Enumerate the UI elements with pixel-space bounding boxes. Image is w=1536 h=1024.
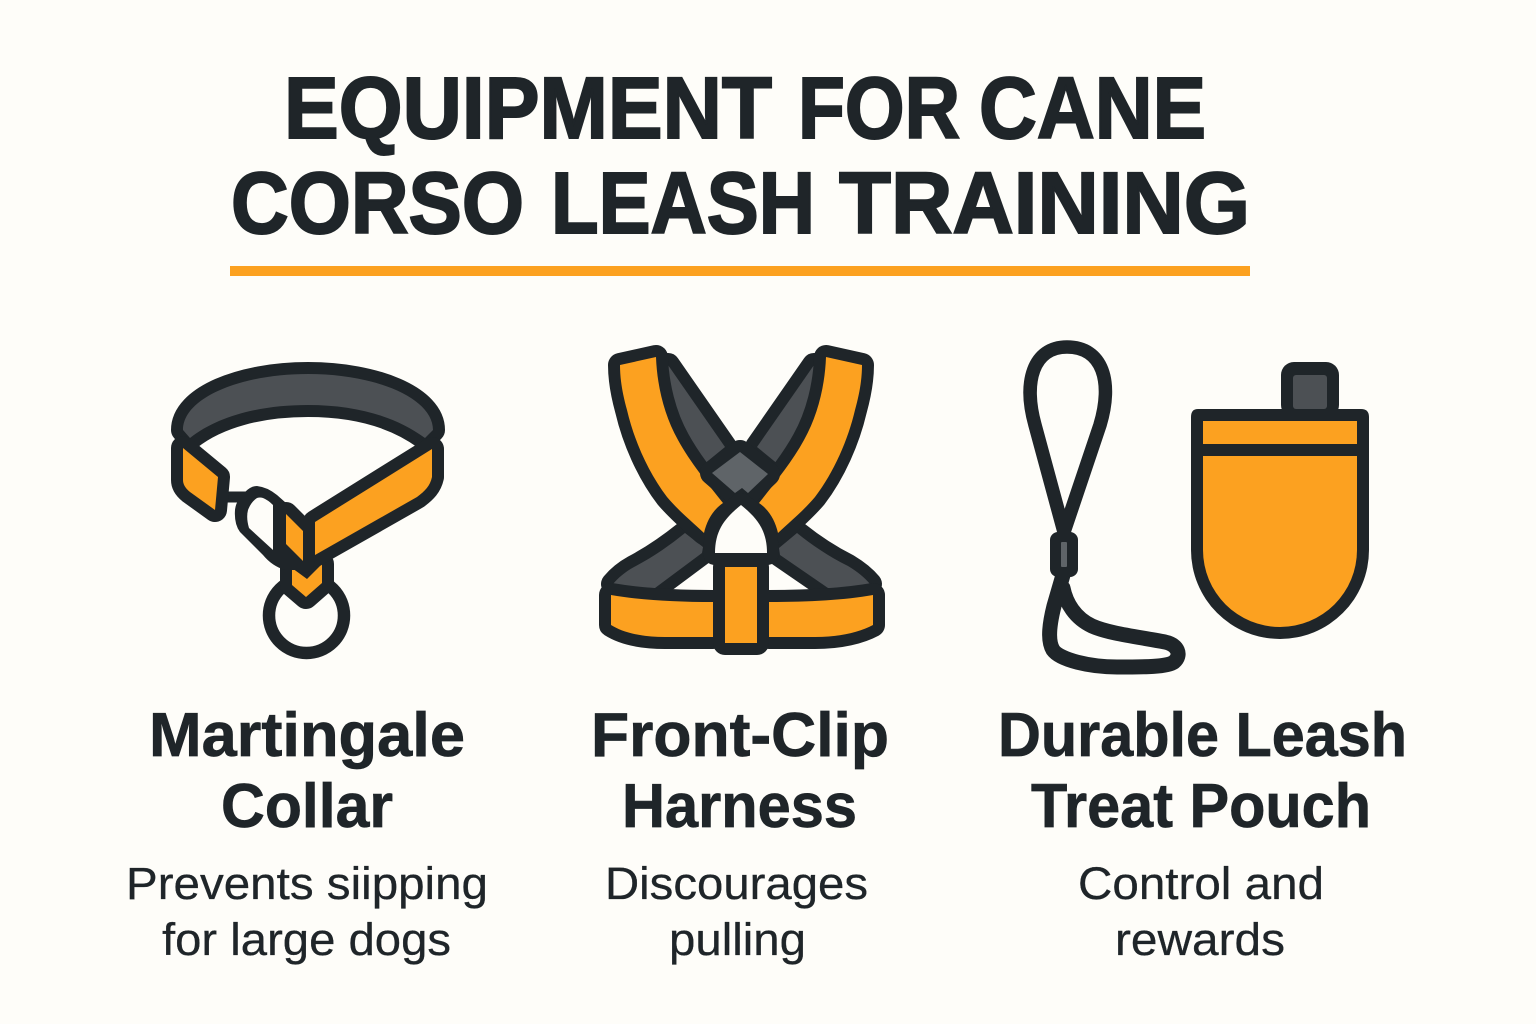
harness chest band right [769, 595, 873, 637]
icon: front-clip harness [611, 357, 873, 643]
title: EQUIPMENT [284, 60, 772, 157]
harness centre strap [725, 567, 757, 643]
harness neck opening [715, 505, 767, 553]
label: durable leash and treat pouch: Treat Pouch [1031, 772, 1371, 841]
harness right inner webbing [757, 365, 814, 465]
harness left shoulder strap [620, 357, 723, 533]
description: durable leash and treat pouch [1078, 858, 1324, 965]
icon: treat pouch [1191, 362, 1369, 639]
description: front-clip harness [605, 858, 868, 965]
harness lower left strap [613, 533, 703, 588]
label: front-clip harness: Harness [622, 772, 857, 841]
description: martingale collar: for large dogs [162, 914, 451, 965]
description: front-clip harness: pulling [669, 914, 806, 965]
title: TRAINING [839, 155, 1250, 252]
leash lower strand [1050, 575, 1178, 667]
leash handle loop [1030, 347, 1105, 532]
description: durable leash and treat pouch: rewards [1115, 914, 1285, 965]
title underline [230, 266, 1250, 276]
collar centre strap [286, 514, 303, 561]
title [231, 60, 1250, 252]
description: front-clip harness: Discourages [605, 858, 868, 909]
title: FOR [798, 60, 960, 157]
collar sliding loop [226, 486, 303, 570]
pouch outline [1191, 409, 1369, 639]
description: durable leash and treat pouch: Control and [1078, 858, 1324, 909]
leash clasp highlight [1061, 542, 1067, 567]
label: front-clip harness [591, 701, 889, 841]
pouch tab insert [1293, 375, 1327, 409]
collar left strap [183, 448, 218, 510]
leash clasp [1050, 532, 1078, 577]
collar ring [269, 578, 344, 653]
collar back band [183, 374, 433, 438]
label: martingale collar: Martingale [149, 701, 465, 770]
harness chest band left [611, 595, 713, 637]
collar lower tab [292, 564, 322, 597]
pouch body [1203, 456, 1357, 627]
harness chest plate [712, 452, 768, 493]
description: martingale collar: Prevents siipping [126, 858, 488, 909]
harness right shoulder strap [759, 357, 862, 533]
pouch flap [1203, 421, 1357, 444]
description: martingale collar [126, 858, 488, 965]
title: CORSO [231, 155, 524, 252]
icon: durable leash [1030, 347, 1178, 667]
label: martingale collar: Collar [221, 772, 393, 841]
label: front-clip harness: Front-Clip [591, 701, 889, 770]
label: martingale collar [149, 701, 465, 841]
label: durable leash and treat pouch [998, 701, 1407, 841]
label: durable leash and treat pouch: Durable Leash [998, 701, 1407, 770]
title: CANE [979, 60, 1206, 157]
icon: martingale collar [183, 374, 433, 653]
title: LEASH [551, 155, 815, 252]
harness lower right strap [779, 533, 870, 588]
pouch tab [1281, 362, 1339, 418]
harness left inner webbing [668, 365, 725, 465]
collar right strap [315, 449, 432, 555]
